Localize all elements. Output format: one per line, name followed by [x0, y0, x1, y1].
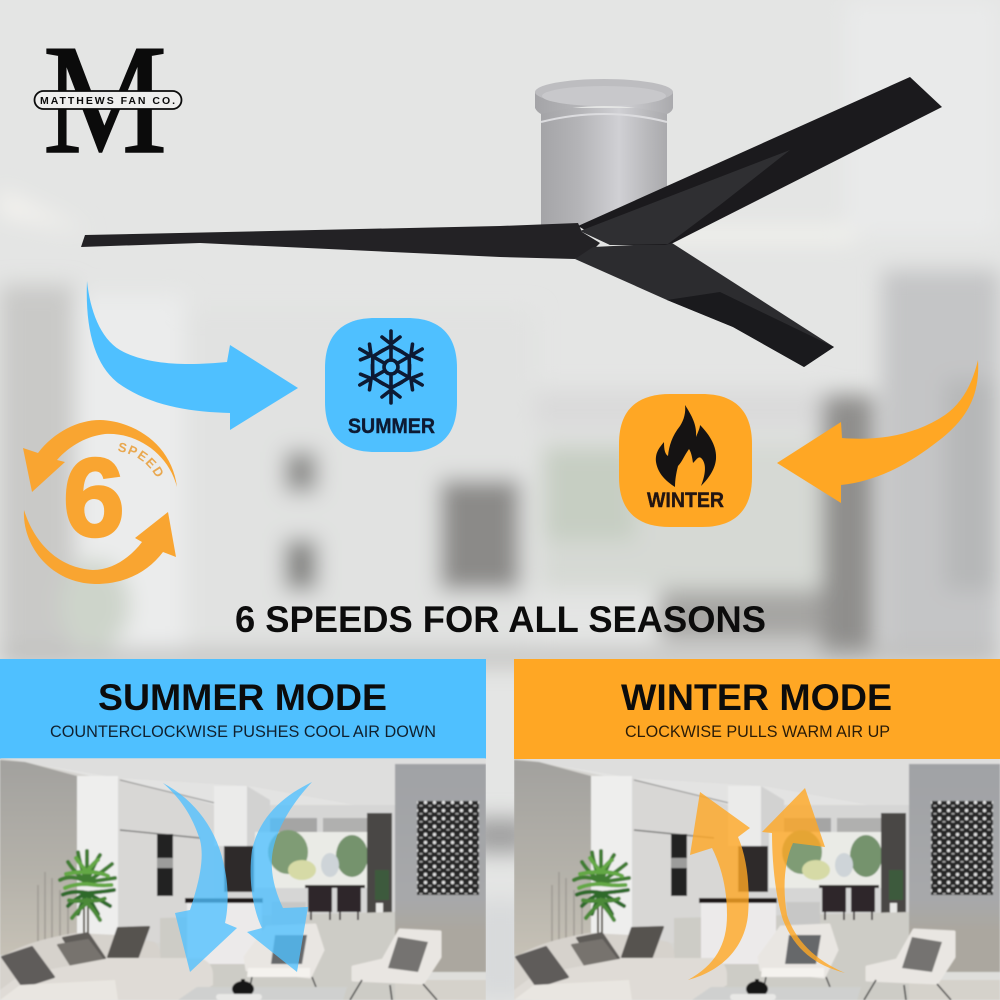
- winter mode title: WINTER MODE: [621, 677, 892, 718]
- icon: flame: [656, 405, 716, 487]
- summer mode description: COUNTERCLOCKWISE PUSHES COOL AIR DOWN: [50, 722, 436, 741]
- panel: winter mode header: [514, 659, 1000, 759]
- icon tile: winter: [619, 394, 752, 527]
- fan blade: lower right: [575, 243, 834, 367]
- label: winter: WINTER: [647, 489, 724, 512]
- summer mode title: SUMMER MODE: [98, 677, 387, 718]
- fan motor housing: [535, 79, 673, 226]
- icon tile: summer: [325, 318, 457, 452]
- arrow: summer curved blue: [87, 281, 298, 430]
- panel: summer mode header: [0, 659, 486, 759]
- photo: living room, winter airflow: [514, 758, 1000, 1000]
- numeral 6: 6: [63, 436, 125, 560]
- arrow: warm air up left: [688, 792, 750, 980]
- arrow: winter curved orange: [777, 360, 978, 503]
- arrow: cool air down left: [163, 783, 237, 972]
- arrow: warm air up right: [762, 788, 845, 973]
- label: summer: SUMMER: [348, 415, 435, 438]
- logo: Matthews Fan Co.: M: [43, 12, 167, 186]
- label: speed on arc: SPEED: [118, 442, 163, 476]
- ceiling fan: [81, 77, 942, 367]
- heading: 6 SPEEDS FOR ALL SEASONS: [235, 599, 766, 640]
- arrow: cool air down right: [247, 782, 312, 972]
- photo: living room, summer airflow: [0, 758, 486, 1000]
- badge: 6 speed: [23, 420, 177, 584]
- fan blade: upper right: [578, 77, 942, 245]
- icon: snowflake: [354, 331, 428, 403]
- arrow: upper rotation: [23, 420, 177, 492]
- winter mode description: CLOCKWISE PULLS WARM AIR UP: [625, 722, 890, 741]
- logo: Matthews Fan Co.: MATTHEWS FAN CO.: [40, 95, 175, 107]
- arrow: lower rotation: [24, 510, 176, 584]
- fan blade: left: [81, 223, 600, 259]
